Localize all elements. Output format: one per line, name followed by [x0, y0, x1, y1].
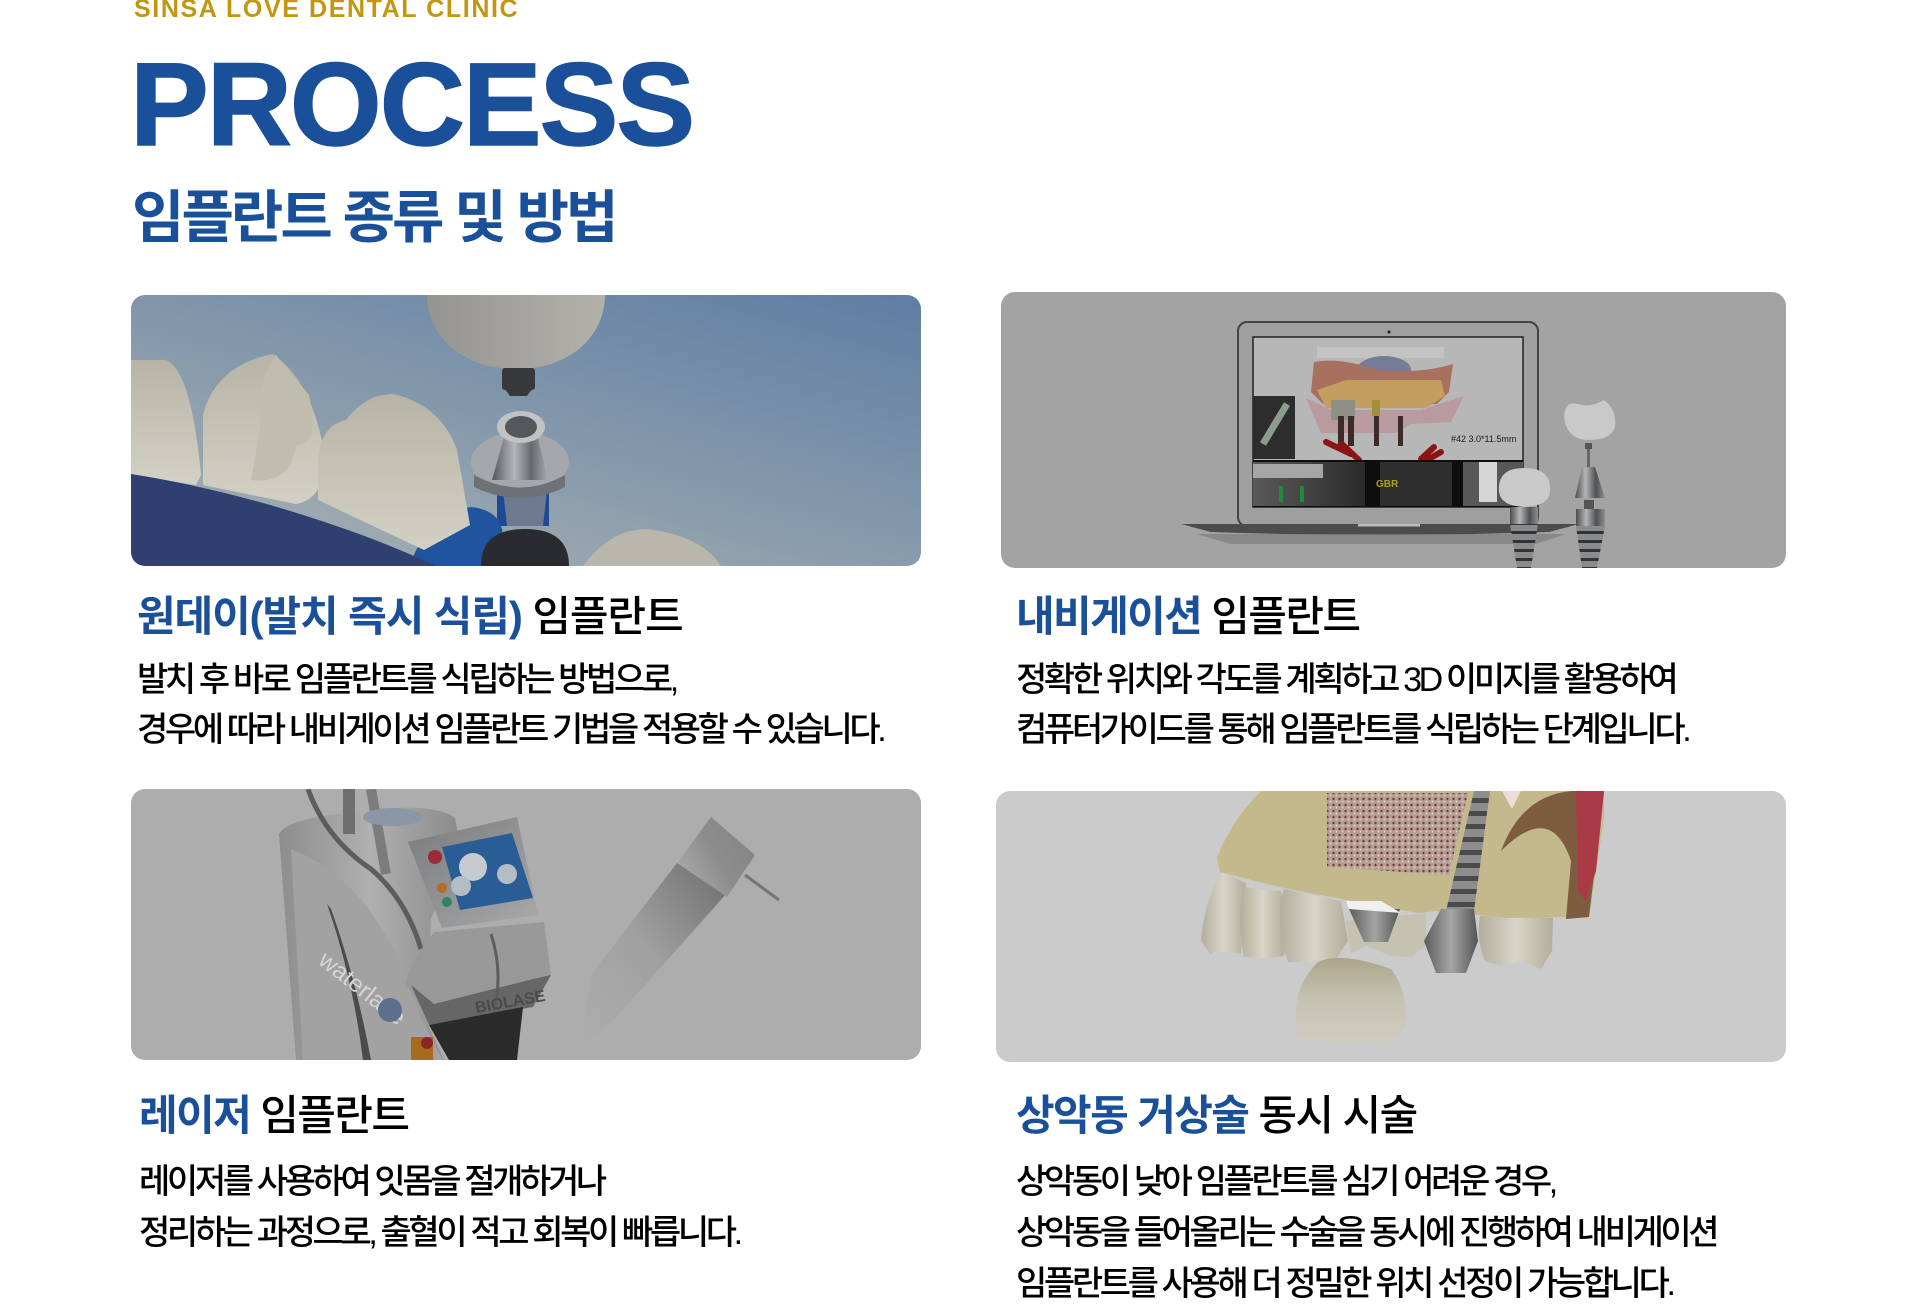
subtitle: 임플란트 종류 및 방법 [132, 186, 615, 250]
ct thumbnail [1253, 396, 1295, 459]
heading: 상악동 거상술 동시 시술 [1016, 1092, 1417, 1139]
measure label: #42 3.0*11.5mm [1451, 434, 1516, 444]
lower tooth [583, 529, 721, 566]
implant model 1 [1499, 468, 1550, 507]
laptop base [1181, 524, 1579, 535]
line: 컴퓨터가이드를 통해 임플란트를 식립하는 단계입니다. [1016, 711, 1688, 749]
line: 상악동이 낮아 임플란트를 심기 어려운 경우, [1016, 1163, 1555, 1201]
teeth row [1201, 872, 1246, 954]
line: 레이저를 사용하여 잇몸을 절개하거나 [139, 1163, 604, 1201]
title: PROCESS: PROCESS [130, 39, 693, 171]
3d arch [1357, 356, 1411, 384]
abutments [1424, 909, 1478, 973]
handpiece [580, 863, 727, 1048]
line: 임플란트를 사용해 더 정밀한 위치 선정이 가능합니다. [1016, 1265, 1673, 1303]
heading: 원데이(발치 즉시 식립) 임플란트 [137, 593, 683, 640]
arm tubes [308, 789, 421, 949]
line: 상악동을 들어올리는 수술을 동시에 진행하여 내비게이션 [1016, 1214, 1716, 1252]
heading: 내비게이션 임플란트 [1016, 593, 1359, 640]
implant model 2 [1564, 400, 1615, 440]
heading + text: one-day implant [137, 593, 884, 749]
panel: navigation implant image [1001, 292, 1786, 568]
panel: one-day implant image [131, 295, 921, 566]
brown and red tissue [1501, 791, 1604, 919]
implant collar [481, 529, 569, 566]
panel: laser implant image: waterlase [313, 946, 411, 1031]
line: 정확한 위치와 각도를 계획하고 3D 이미지를 활용하여 [1016, 661, 1675, 699]
bone [1217, 791, 1604, 918]
heading + text: laser implant [139, 1092, 740, 1252]
laptop lid [1238, 322, 1538, 526]
panel: navigation implant image: GBR [1376, 479, 1399, 490]
control panel [408, 817, 538, 928]
screw implant [1446, 791, 1490, 911]
panel: laser implant image: BIOLASE [474, 988, 547, 1017]
blue gum [411, 507, 523, 566]
graft block [1327, 793, 1468, 875]
line: 경우에 따라 내비게이션 임플란트 기법을 적용할 수 있습니다. [137, 711, 883, 749]
machine body [279, 808, 461, 1060]
line: 정리하는 과정으로, 출혈이 적고 회복이 빠릅니다. [139, 1214, 740, 1252]
panel: sinus lift image [996, 791, 1786, 1062]
lower housing [405, 922, 551, 1022]
abutment [497, 480, 549, 526]
heading + text: sinus lift [1016, 1092, 1716, 1303]
heading + text: navigation implant [1016, 593, 1689, 749]
machine base [429, 1007, 523, 1060]
screen toolbar [1317, 347, 1444, 358]
x-ray panels [1253, 460, 1523, 507]
crown [427, 295, 605, 369]
panel: laser implant image [131, 789, 921, 1060]
loose crown [1296, 958, 1406, 1048]
gum [131, 474, 436, 566]
teeth [131, 360, 201, 485]
heading: 레이저 임플란트 [139, 1092, 408, 1139]
line: 발치 후 바로 임플란트를 식립하는 방법으로, [137, 661, 676, 699]
red nerves [1326, 442, 1359, 460]
